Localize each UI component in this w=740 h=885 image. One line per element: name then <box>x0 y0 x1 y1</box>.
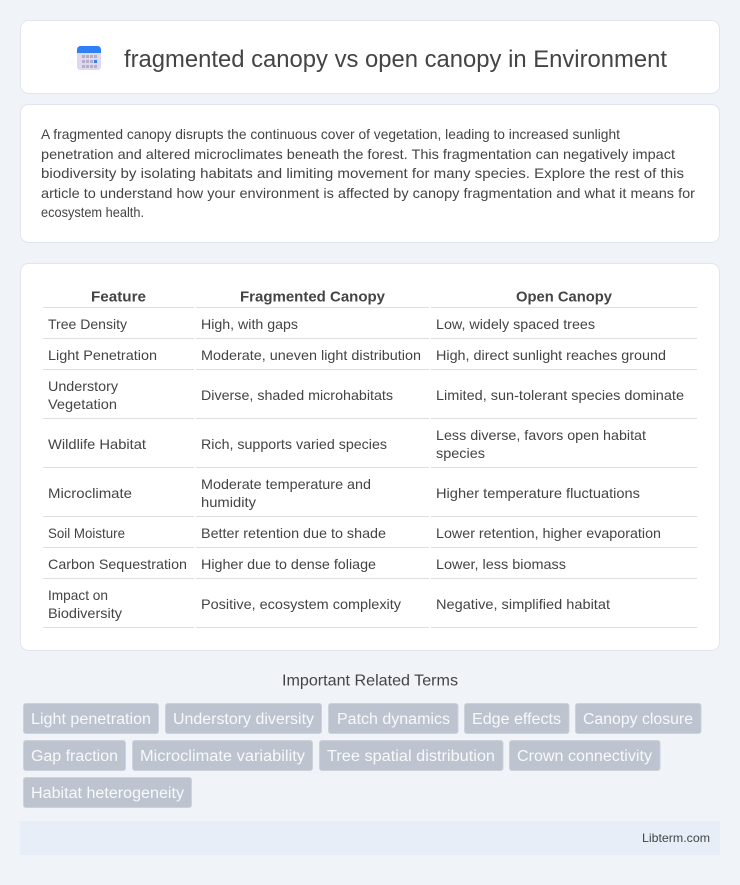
row: impact on biodiversity: Biodiversity <box>48 605 122 621</box>
related term tags: Habitat heterogeneity <box>31 785 184 802</box>
row: wildlife habitat <box>48 427 646 461</box>
panel: introduction <box>20 104 720 242</box>
row: carbon sequestration: Lower, less biomass <box>436 556 566 572</box>
row: tree density: Low, widely spaced trees <box>436 316 595 332</box>
row: understory vegetation <box>48 378 684 412</box>
row: microclimate: humidity <box>201 494 256 510</box>
related term tags: Gap fraction <box>31 748 118 765</box>
table header: Feature <box>91 288 146 306</box>
intro text <box>41 126 695 220</box>
row: microclimate <box>48 476 640 510</box>
related term tags <box>24 704 701 808</box>
row: microclimate: Higher temperature fluctuations <box>436 485 640 501</box>
intro text: biodiversity by isolating habitats and limiting movement for many species. Explore the rest of this <box>41 165 684 181</box>
footer: Libterm.com <box>642 831 710 845</box>
row: light penetration <box>48 347 666 363</box>
intro text: ecosystem health. <box>41 204 144 220</box>
row: impact on biodiversity: Positive, ecosystem complexity <box>201 596 401 612</box>
row: tree density <box>48 316 595 332</box>
row: impact on biodiversity <box>48 587 610 621</box>
row: microclimate: Microclimate <box>48 485 132 501</box>
table header: Fragmented Canopy <box>240 288 386 306</box>
related term tags: Light penetration <box>31 711 151 728</box>
row: wildlife habitat: Less diverse, favors open habitat <box>436 427 646 443</box>
footer <box>20 821 720 855</box>
panel: comparison table <box>20 264 720 650</box>
related term tags: Crown connectivity <box>517 748 652 765</box>
related term tags: Patch dynamics <box>337 711 450 728</box>
row: soil moisture: Soil Moisture <box>48 525 125 541</box>
related term tags: Canopy closure <box>583 711 693 728</box>
row: impact on biodiversity: Negative, simplified habitat <box>436 596 610 612</box>
row: understory vegetation: Limited, sun-tolerant species dominate <box>436 387 684 403</box>
intro text: A fragmented canopy disrupts the continuous cover of vegetation, leading to increased sunlight <box>41 126 620 142</box>
row: carbon sequestration: Higher due to dense foliage <box>201 556 376 572</box>
row: light penetration: Moderate, uneven light distribution <box>201 347 421 363</box>
intro text: article to understand how your environment is affected by canopy fragmentation and what it means for <box>41 185 695 201</box>
title: fragmented canopy vs open canopy in Environment <box>124 46 667 73</box>
row: light penetration: Light Penetration <box>48 347 157 363</box>
row: microclimate: Moderate temperature and <box>201 476 371 492</box>
row: understory vegetation: Understory <box>48 378 118 394</box>
row: soil moisture: Lower retention, higher evaporation <box>436 525 661 541</box>
row: wildlife habitat: Wildlife Habitat <box>48 436 146 452</box>
row: wildlife habitat: Rich, supports varied species <box>201 436 387 452</box>
row: impact on biodiversity: Impact on <box>48 587 108 603</box>
related term tags: Edge effects <box>472 711 561 728</box>
row: carbon sequestration <box>48 556 566 572</box>
row: soil moisture <box>48 525 661 541</box>
row: carbon sequestration: Carbon Sequestration <box>48 556 187 572</box>
related term tags: Microclimate variability <box>140 748 305 765</box>
related term tags: Understory diversity <box>173 711 314 728</box>
row: understory vegetation: Diverse, shaded microhabitats <box>201 387 393 403</box>
icon: calendar <box>77 46 101 70</box>
row: wildlife habitat: species <box>436 445 485 461</box>
table header <box>91 288 613 306</box>
row: tree density: Tree Density <box>48 316 127 332</box>
intro text: penetration and altered microclimates beneath the forest. This fragmentation can negatively impact <box>41 146 675 162</box>
table header: Open Canopy <box>516 288 613 306</box>
row: soil moisture: Better retention due to shade <box>201 525 386 541</box>
row: tree density: High, with gaps <box>201 316 298 332</box>
related term tags: Tree spatial distribution <box>327 748 495 765</box>
row: light penetration: High, direct sunlight reaches ground <box>436 347 666 363</box>
header panel <box>20 20 720 94</box>
heading: important related terms: Important Related Terms <box>282 672 458 690</box>
row: understory vegetation: Vegetation <box>48 396 117 412</box>
